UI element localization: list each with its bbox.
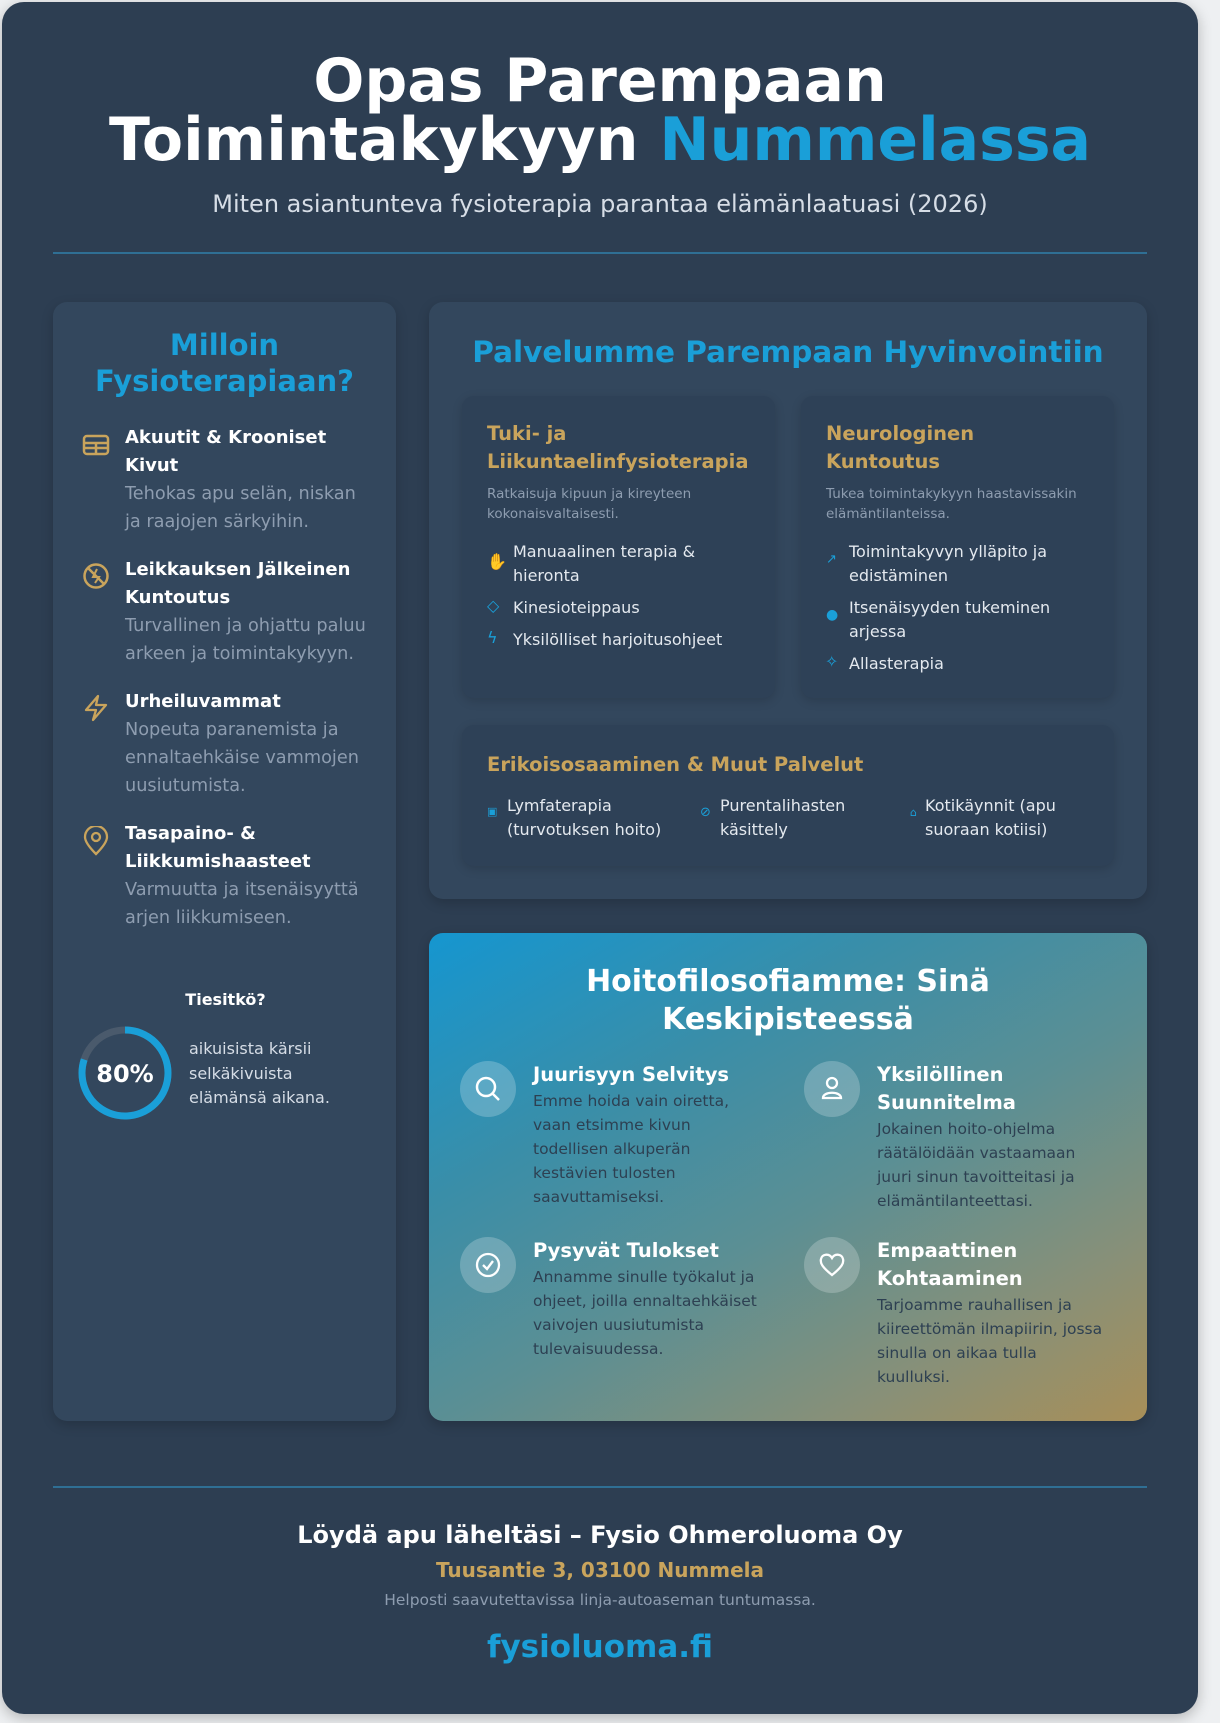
item: empaattinen kohtaaminen: Kohtaaminen (877, 1267, 1023, 1290)
callout: Tiesitkö: Tiesitkö? (185, 990, 266, 1009)
item: leikkaus (83, 559, 366, 664)
card: erikoisosaaminen: ▣ (487, 805, 497, 818)
item: yksilöllinen suunnitelma: Yksilöllinen (877, 1063, 1004, 1086)
icon: user (804, 1061, 860, 1117)
card: tuki- ja liikuntaelin: ◇ (487, 596, 499, 615)
card: neurologinen: arjessa (849, 622, 906, 641)
card: neurologinen: Allasterapia (849, 654, 944, 673)
item: yksilöllinen suunnitelma: räätälöidään vastaamaan (877, 1144, 1075, 1162)
item: juurisyyn selvitys: saavuttamiseksi. (533, 1188, 664, 1206)
item: leikkaus: arkeen ja toimintakykyyn. (125, 644, 354, 664)
item: empaattinen kohtaaminen: Empaattinen (877, 1239, 1017, 1262)
card: tuki- ja liikuntaelin: kokonaisvaltaisesti. (487, 506, 619, 522)
footer: Löydä apu läheltäsi – Fysio Ohmeroluoma Oy (297, 1521, 903, 1549)
callout: Tiesitkö: selkäkivuista (189, 1064, 293, 1082)
item: pysyvät tulokset: tulevaisuudessa. (533, 1340, 663, 1358)
item: juurisyyn selvitys (460, 1061, 729, 1206)
item: juurisyyn selvitys: todellisen alkuperän (533, 1140, 690, 1158)
item: pysyvät tulokset: ohjeet, joilla ennaltaehkäiset (533, 1292, 757, 1310)
item: tasapaino: Liikkumishaasteet (125, 851, 311, 872)
card: tuki- ja liikuntaelin: hieronta (513, 566, 580, 585)
card: tuki- ja liikuntaelin: Yksilölliset harjoitusohjeet (513, 630, 722, 649)
item: pysyvät tulokset: Pysyvät Tulokset (533, 1239, 719, 1262)
item: kivut (82, 427, 356, 532)
item: urheiluvammat (84, 691, 359, 796)
card: tuki- ja liikuntaelin: Liikuntaelinfysioterapia (487, 450, 748, 473)
item: urheiluvammat: Nopeuta paranemista ja (125, 720, 339, 740)
item: juurisyyn selvitys: kestävien tulosten (533, 1164, 676, 1182)
icon: check (460, 1237, 516, 1293)
item: leikkaus: Turvallinen ja ohjattu paluu (125, 616, 366, 636)
item: yksilöllinen suunnitelma: Jokainen hoito-ohjelma (877, 1120, 1055, 1138)
card: erikoisosaaminen: Lymfaterapia (507, 796, 612, 815)
icon: heart (804, 1237, 860, 1293)
heading: Milloin Fysioterapiaan: Milloin (170, 328, 279, 362)
card: neurologinen: edistäminen (849, 566, 948, 585)
heading: Palvelumme: Palvelumme Parempaan Hyvinvointiin (472, 335, 1104, 369)
callout: Tiesitkö (78, 990, 330, 1120)
item: juurisyyn selvitys: vaan etsimme kivun (533, 1116, 691, 1134)
item: pysyvät tulokset: vaivojen uusiutumista (533, 1316, 704, 1334)
item: juurisyyn selvitys: Emme hoida vain oiretta, (533, 1092, 729, 1110)
card: erikoisosaaminen: suoraan kotiisi) (925, 820, 1047, 839)
card: tuki- ja liikuntaelin: Tuki- ja (487, 422, 566, 445)
title: Opas Parempaan (313, 46, 887, 116)
item: urheiluvammat: ennaltaehkäise vammojen (125, 748, 359, 768)
item: tasapaino: arjen liikkumiseen. (125, 908, 292, 928)
item: empaattinen kohtaaminen: kiireettömän ilmapiirin, jossa (877, 1320, 1102, 1338)
card: neurologinen: Itsenäisyyden tukeminen (849, 598, 1050, 617)
item: pysyvät tulokset: Annamme sinulle työkalut ja (533, 1268, 754, 1286)
chart: 80% ring: 80% (96, 1060, 154, 1088)
item: empaattinen kohtaaminen: Tarjoamme rauhallisen ja (877, 1296, 1072, 1314)
card: neurologinen: Neurologinen (826, 422, 974, 445)
card: erikoisosaaminen: (turvotuksen hoito) (507, 820, 661, 839)
card: neurologinen: Tukea toimintakykyyn haastavissakin (826, 486, 1077, 502)
item: yksilöllinen suunnitelma (804, 1061, 1075, 1210)
card: neurologinen: Toimintakyvyn ylläpito ja (849, 542, 1047, 561)
card: tuki- ja liikuntaelin: Kinesioteippaus (513, 598, 640, 617)
card: neurologinen: ● (826, 607, 838, 623)
card: tuki- ja liikuntaelin: ϟ (487, 628, 498, 647)
card: neurologinen: Kuntoutus (826, 450, 940, 473)
item: yksilöllinen suunnitelma: elämäntilanteettasi. (877, 1192, 1033, 1210)
heading: Hoitofilosofiamme: Sinä (586, 964, 990, 999)
panel: services (429, 302, 1147, 899)
card: neurologinen: ✧ (825, 652, 838, 671)
panel: when physiotherapy (53, 302, 396, 1421)
card: erikoisosaaminen: ⊘ (700, 805, 711, 820)
card: neurologinen (801, 396, 1114, 698)
item: leikkaus: Kuntoutus (125, 587, 230, 608)
footer: Tuusantie 3, 03100 Nummela (436, 1558, 764, 1582)
card: erikoisosaaminen: Erikoisosaaminen & Muut Palvelut (487, 753, 863, 776)
heading (586, 964, 990, 1037)
card: erikoisosaaminen: käsittely (720, 820, 788, 839)
item: tasapaino (84, 823, 359, 928)
item: empaattinen kohtaaminen (804, 1237, 1102, 1386)
item: leikkaus: Leikkauksen Jälkeinen (125, 559, 350, 580)
card: tuki- ja liikuntaelin: ✋ (487, 552, 507, 571)
icon: bolt (84, 694, 108, 722)
card: tuki- ja liikuntaelin (462, 396, 775, 698)
card: neurologinen: ↗ (826, 552, 837, 567)
card: erikoisosaaminen: Kotikäynnit (apu (925, 796, 1056, 815)
item: pysyvät tulokset (460, 1237, 757, 1358)
callout: Tiesitkö: aikuisista kärsii (189, 1039, 311, 1058)
icon: no-sign (83, 563, 109, 589)
item: kivut: Kivut (125, 455, 178, 476)
subtitle: Miten asiantunteva fysioterapia parantaa elämänlaatuasi (2026) (212, 190, 988, 218)
heading: Keskipisteessä (662, 1002, 914, 1037)
item: kivut: ja raajojen särkyihin. (125, 512, 309, 532)
item: yksilöllinen suunnitelma: juuri sinun tavoitteitasi ja (877, 1168, 1075, 1186)
title (109, 46, 1091, 175)
card: erikoisosaaminen: ⌂ (910, 806, 917, 819)
heading: Milloin Fysioterapiaan (95, 328, 354, 398)
footer (297, 1521, 903, 1665)
item: yksilöllinen suunnitelma: Suunnitelma (877, 1091, 1016, 1114)
icon: pin (84, 826, 108, 856)
icon: search (460, 1061, 516, 1117)
item: kivut: Tehokas apu selän, niskan (125, 484, 356, 504)
item: tasapaino: Varmuutta ja itsenäisyyttä (125, 880, 359, 900)
chart: 80% ring (78, 1026, 172, 1120)
item: juurisyyn selvitys: Juurisyyn Selvitys (533, 1063, 729, 1086)
footer: Helposti saavutettavissa linja-autoaseman tuntumassa. (384, 1591, 816, 1609)
panel: hoitofilosofia (429, 933, 1147, 1421)
item: urheiluvammat: Urheiluvammat (125, 691, 281, 712)
item: empaattinen kohtaaminen: sinulla on aikaa tulla (877, 1344, 1037, 1362)
title: Toimintakykyyn Nummelassa (109, 105, 1091, 175)
callout: Tiesitkö: elämänsä aikana. (189, 1088, 330, 1107)
heading: Milloin Fysioterapiaan: Fysioterapiaan? (95, 364, 354, 398)
card: tuki- ja liikuntaelin: Ratkaisuja kipuun ja kireyteen (487, 486, 691, 502)
item: tasapaino: Tasapaino- & (125, 823, 256, 844)
item: kivut: Akuutit & Krooniset (125, 427, 326, 448)
card: erikoisosaaminen: Purentalihasten (720, 796, 845, 815)
card: neurologinen: elämäntilanteissa. (826, 506, 950, 522)
item: empaattinen kohtaaminen: kuulluksi. (877, 1368, 950, 1386)
icon: table (82, 434, 110, 456)
card: tuki- ja liikuntaelin: Manuaalinen terapia & (513, 542, 695, 561)
item: urheiluvammat: uusiutumista. (125, 776, 246, 796)
footer: fysioluoma.fi (487, 1629, 713, 1665)
card: erikoisosaaminen (462, 725, 1114, 866)
